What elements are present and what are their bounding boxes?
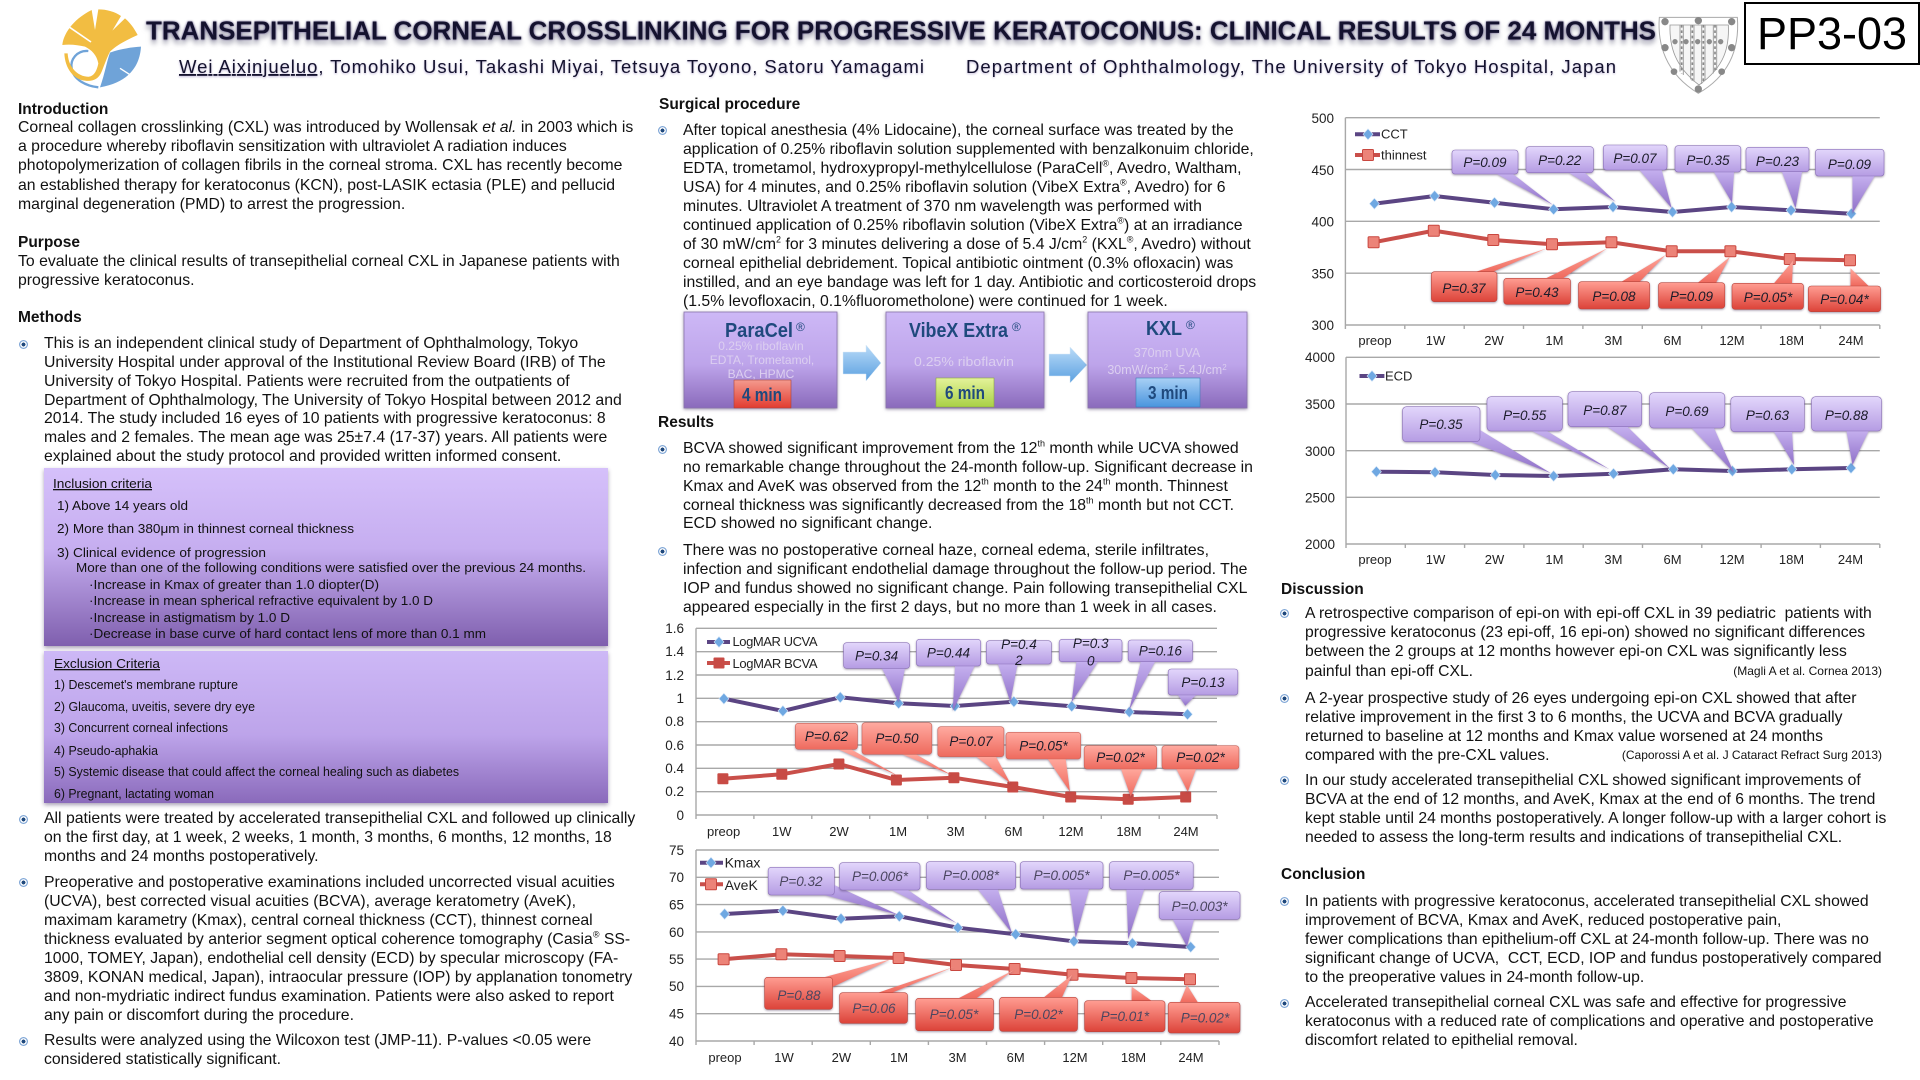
text: results bullet 2: IOP and fundus showed no significant change. Pain following transepithelial CXL [683,580,1247,597]
step: ParaCel [684,312,837,408]
text: discussion bullet 1 [1305,604,1882,681]
step: ParaCel: 4 min [742,385,782,405]
chart: CCT and thinnest: 12M [1719,333,1745,348]
logo: ginkgo leaf [62,9,141,88]
chart: CCT and thinnest: preop [1358,333,1392,348]
chart: CCT and thinnest: P=0.09 [1670,289,1714,304]
text: introduction body [18,119,633,213]
chart: LogMAR UCVA and BCVA: 2W [829,824,849,839]
chart: CCT and thinnest: P=0.07 [1613,151,1657,166]
text: conclusion bullet 1: significant change of UCVA, CCT, ECD, IOP and fundus postoperatively compared [1305,950,1882,967]
legend: CCT [1381,126,1408,141]
chart: LogMAR UCVA and BCVA: 1.2 [665,668,684,683]
chart: LogMAR UCVA and BCVA: 0.4 [665,761,684,776]
chart: LogMAR UCVA and BCVA: 0.8 [665,714,684,729]
text: discussion bullet 1: A retrospective comparison of epi-on with epi-off CXL in 39 pediatric patients with [1305,605,1872,622]
text: introduction body: photopolymerization of collagen fibrils in the corneal stroma. CXL has recently become [18,157,622,174]
chart: LogMAR UCVA and BCVA: P=0.13 [1181,675,1225,690]
panel: exclusion criteria: 1) Descemet's membrane rupture [54,677,238,692]
text: surgical procedure body: of 30 mW/cm2 for 3 minutes delivering a dose of 5.4 J/cm2 (KXL®, Avedro) without [683,235,1251,253]
text: discussion bullet 3: needed to assess the long-term results and indications of transepithelial CXL. [1305,829,1842,846]
chart: CCT and thinnest: 6M [1663,333,1682,348]
text: methods bullet 2: on the first day, at 1 week, 2 weeks, 1 month, 3 months, 6 months, 12 months, 18 [44,829,612,846]
text: discussion bullet 3: BCVA at the end of 12 months, and AveK, Kmax at the end of 6 months. The trend [1305,791,1875,808]
chart: LogMAR UCVA and BCVA: P=0.02* [1176,750,1225,765]
step: VibeX Extra: 0.25% riboflavin [914,354,1014,369]
text: results bullet 2 [683,542,1247,617]
chart: CCT and thinnest: 1M [1545,333,1563,348]
text: methods bullet 3: 1000, TOMEY, Japan), endothelial cell density (ECD) by specular microscopy (FA- [44,950,618,967]
text: methods bullet 3: and non-mydriatic indirect fundus examination. Patients were also asked to report [44,988,614,1005]
chart: LogMAR UCVA and BCVA: 1.4 [665,644,684,659]
chart: Kmax and AveK: 24M [1178,1050,1204,1065]
chart: ECD: 1W [1426,552,1446,567]
heading: Purpose: Purpose [18,234,80,251]
text: discussion bullet 2: relative improvement in the first 3 to 6 months, the UCVA and BCVA gradually [1305,709,1842,726]
text: results bullet 2: infection and significant endothelial damage throughout the follow-up period. The [683,561,1247,578]
text: methods bullet 3: maximam karametry (Kmax), central corneal thickness (CCT), thinnest corneal [44,912,593,929]
chart: LogMAR UCVA and BCVA: P=0.05* [1019,738,1068,754]
chart: ECD: P=0.63 [1746,408,1790,423]
text: methods bullet 4 [44,1032,591,1070]
chart: Kmax and AveK: P=0.02* [1181,1010,1230,1026]
text: results bullet 1 [683,440,1253,534]
panel: inclusion criteria: 1) Above 14 years old [57,498,188,513]
panel: exclusion criteria: 6) Pregnant, lactating woman [54,786,214,801]
text: conclusion bullet 1: fewer complications than epithelium-off CXL at 24-month follow-up. There was no [1305,931,1869,948]
text: results bullet 2: appeared especially in the first 2 days, but no more than 1 week in all cases. [683,599,1217,616]
panel: exclusion criteria: 2) Glaucoma, uveitis, severe dry eye [54,699,255,714]
text: methods bullet 1: University Hospital under approval of the Institutional Review Board (IRB) of The [44,354,606,371]
text: purpose body: To evaluate the clinical results of transepithelial corneal CXL in Japanese patients with [18,253,620,270]
panel: exclusion criteria: 4) Pseudo-aphakia [54,743,159,758]
step: ParaCel: EDTA, Trometamol, [710,353,814,367]
chart: Kmax and AveK: 12M [1062,1050,1088,1065]
chart: ECD: 2500 [1305,490,1335,506]
text: discussion bullet 2: returned to baseline at 12 months and Kmax value worsened at 24 months [1305,728,1823,745]
chart: CCT and thinnest: P=0.22 [1538,153,1582,168]
chart: LogMAR UCVA and BCVA: P=0.16 [1139,644,1182,658]
chart: Kmax and AveK: 2W [832,1050,852,1065]
heading: Discussion: Discussion [1281,581,1364,598]
chart: CCT and thinnest: 350 [1311,266,1334,282]
text: results bullet 1: corneal thickness was significantly decreased from the 18th month but not CCT. [683,495,1234,514]
text: surgical procedure body: minutes. Ultraviolet A treatment of 370 nm wavelength was performed with [683,198,1202,215]
chart: Kmax and AveK: P=0.05* [930,1007,979,1022]
panel: exclusion criteria: 3) Concurrent corneal infections [54,720,228,735]
chart: Kmax and AveK: P=0.01* [1101,1009,1150,1024]
heading: Results: Results [658,414,714,431]
chart: CCT and thinnest: 300 [1311,318,1334,333]
panel: inclusion criteria: 3) Clinical evidence of progression [57,545,266,560]
chart: LogMAR UCVA and BCVA: preop [707,824,740,839]
text: methods bullet 2: months and 24 months postoperatively. [44,848,319,865]
legend: AveK [725,877,758,893]
legend [1355,126,1427,162]
legend: LogMAR BCVA [732,656,818,671]
chart: Kmax and AveK: P=0.02* [1014,1007,1063,1022]
panel: inclusion criteria: ·Increase in mean spherical refractive equivalent by 1.0 D [89,593,433,608]
chart: ECD: preop [1358,552,1392,567]
text: surgical procedure body: instilled, and an eye bandage was left for 1 day. Antibiotic and corticosteroid drops [683,274,1256,291]
arrow: ParaCel to VibeX [843,345,881,381]
text: discussion bullet 1: (Magli A et al. Cornea 2013) [1733,664,1882,678]
step: KXL: ® [1186,318,1195,332]
step: KXL: 30mW/cm [1107,363,1164,377]
chart: Kmax and AveK: P=0.005* [1123,868,1180,883]
text: discussion bullet 1: painful than epi-off CXL. [1305,663,1473,680]
text: results bullet 1: BCVA showed significant improvement from the 12th month while UCVA showed [683,439,1239,457]
chart: Kmax and AveK: 6M [1007,1050,1025,1065]
step: VibeX Extra: VibeX Extra [909,320,1009,342]
chart: Kmax and AveK: 1M [890,1050,908,1065]
callouts: P=0.35 [1419,417,1463,432]
text: surgical procedure body: continued application of 0.25% riboflavin solution (VibeX Extra®) at an irradiance [683,216,1243,234]
panel: inclusion criteria: 2) More than 380μm in thinnest corneal thickness [57,521,355,536]
text: results bullet 1: ECD showed no significant change. [683,515,932,532]
title and author header [144,18,1658,79]
text: conclusion bullet 2: Accelerated transepithelial corneal CXL was safe and effective for progressive [1305,994,1847,1011]
text: methods bullet 1: explained about the study protocol and provided written informed consent. [44,448,561,465]
chart: LogMAR UCVA and BCVA: P=0.07 [949,734,993,749]
text: conclusion bullet 2 [1305,994,1874,1051]
chart: Kmax and AveK: P=0.006* [852,869,909,884]
text: methods bullet 1: males and 2 females. The mean age was 25±7.4 (17-37) years. All patients were [44,429,607,446]
text: discussion bullet 2: compared with the pre-CXL values. [1305,747,1549,764]
step: ParaCel: 0.25% riboflavin [718,339,804,353]
department: Department of Ophthalmology, The University of Tokyo Hospital, Japan [966,56,1616,77]
text: methods bullet 3: (UCVA), best corrected visual acuities (BCVA), average keratometry (AveK), [44,893,576,910]
text: conclusion bullet 1: to the preoperative values in 24-month follow-up. [1305,969,1644,986]
text: methods bullet 1: Department of Ophthalmology, The University of Tokyo Hospital between 2012 and [44,392,622,409]
chart: CCT and thinnest: 400 [1311,214,1334,230]
text: introduction body: marginal degeneration (PMD) to arrest the progression. [18,196,405,213]
chart: Kmax and AveK: 55 [669,952,684,967]
legend: Kmax [725,855,760,871]
chart: CCT and thinnest: P=0.09 [1828,157,1872,172]
chart: LogMAR UCVA and BCVA: P=0.3 [1073,636,1109,651]
text: surgical procedure body: USA) for 4 minutes, and 0.25% riboflavin solution (VibeX Extra®, Avedro) for 6 [683,178,1226,196]
callouts: P=0.34 [855,648,898,664]
step: VibeX Extra [886,312,1044,408]
chart: Kmax and AveK: 70 [669,870,684,885]
text: discussion bullet 3: In our study accelerated transepithelial CXL showed significant improvements of [1305,772,1861,789]
chart: LogMAR UCVA and BCVA: 2 [1014,653,1023,668]
text: results bullet 1: Kmax and AveK was observed from the 12th month to the 24th month. Thinnest [683,476,1228,495]
chart: ECD: 24M [1838,552,1863,567]
text: discussion bullet 3 [1305,771,1886,847]
chart: LogMAR UCVA and BCVA: P=0.4 [1001,637,1037,652]
step: KXL: KXL [1146,318,1182,340]
chart: LogMAR UCVA and BCVA: 18M [1116,824,1142,839]
chart: Kmax and AveK: P=0.005* [1034,868,1090,883]
chart: Kmax and AveK: 3M [948,1050,967,1065]
chart: LogMAR UCVA and BCVA: 1.6 [665,621,684,636]
text: introduction body: a procedure whereby riboflavin sensitization with ultraviolet A radiation induces [18,138,567,155]
chart: CCT and thinnest: 24M [1838,333,1864,348]
text: surgical procedure body: corneal epithelial debridement. Topical antibiotic ointment (0.3% ofloxacin) was [683,255,1233,272]
authors: Wei Aixinjueluo, Tomohiko Usui, Takashi Miyai, Tetsuya Toyono, Satoru Yamagami [179,56,924,77]
chart: Kmax and AveK: preop [708,1050,742,1065]
chart: Kmax and AveK: 50 [669,979,684,994]
chart: CCT and thinnest: P=0.35 [1686,153,1730,168]
legend [707,634,818,671]
text: purpose body [18,253,620,289]
chart: LogMAR UCVA and BCVA: P=0.50 [875,731,919,746]
step: KXL: 2 [1164,363,1169,372]
chart: Kmax and AveK: P=0.06 [852,1001,896,1016]
chart: ECD: 4000 [1305,350,1335,365]
chart: CCT and thinnest: P=0.37 [1442,281,1486,296]
text: surgical procedure body: After topical anesthesia (4% Lidocaine), the corneal surface was treated by the [683,122,1234,139]
text: surgical procedure body: application of 0.25% riboflavin solution supplemented with benzalkonuim chloride, [683,141,1254,158]
text: conclusion bullet 1 [1305,892,1882,987]
chart: CCT and thinnest: 1W [1426,333,1446,348]
step: ParaCel: ParaCel [725,320,793,342]
chart: LogMAR UCVA and BCVA: 12M [1058,824,1084,839]
text: discussion bullet 2: A 2-year prospective study of 26 eyes undergoing epi-on CXL showed that after [1305,690,1856,707]
text: methods bullet 2 [44,810,635,867]
text: surgical procedure body: EDTA, trometamol, hydroxypropyl-methylcellulose (ParaCell®, Avedro, Waltham, [683,159,1242,177]
panel: exclusion criteria: 5) Systemic disease that could affect the corneal healing such as diabetes [54,764,459,779]
main title: TRANSEPITHELIAL CORNEAL CROSSLINKING FOR PROGRESSIVE KERATOCONUS: CLINICAL RESULTS OF 24 MONTHS [146,18,1656,46]
chart: Kmax and AveK: 75 [669,843,684,858]
arrow: VibeX to KXL [1049,347,1087,383]
chart: LogMAR UCVA and BCVA: P=0.62 [805,729,848,744]
text: conclusion bullet 2: discomfort related to epithelial removal. [1305,1032,1578,1049]
chart: ECD: 6M [1663,552,1682,567]
chart: Kmax and AveK: P=0.003* [1172,899,1228,914]
text: methods bullet 1 [44,335,622,467]
chart: ECD: 3000 [1305,444,1335,459]
chart: CCT and thinnest: P=0.05* [1744,290,1793,305]
step: VibeX Extra: 6 min [945,383,985,403]
text: surgical procedure body: (1.5% levofloxacin, 0.1%fluorometholone) were continued for 1 week. [683,293,1168,310]
panel: inclusion criteria: More than one of the following conditions were satisfied over the previous 24 months. [76,560,586,575]
text: methods bullet 1: University of Tokyo Hospital. Patients were recruited from the outpatients of [44,373,570,390]
chart: Kmax and AveK: 45 [669,1006,684,1022]
heading: Surgical procedure: Surgical procedure [659,96,800,113]
text: discussion bullet 3: kept stable until 24 months postoperatively. A longer follow-up with a larger cohort is [1305,810,1886,827]
chart: Kmax and AveK: 60 [669,925,684,940]
text: surgical procedure body [683,121,1256,311]
text: methods bullet 1: 2014. The study included 16 eyes of 10 patients with progressive keratoconus: 8 [44,410,606,427]
panel: exclusion criteria: Exclusion Criteria [54,656,161,671]
callouts: P=0.32 [779,874,823,889]
chart: Kmax and AveK: P=0.008* [943,868,1000,883]
step: KXL [1088,312,1247,408]
chart: ECD: P=0.69 [1665,404,1709,419]
heading: Methods: Methods [18,309,82,326]
chart: CCT and thinnest: 18M [1779,333,1804,348]
callouts [1402,407,1551,473]
chart: LogMAR UCVA and BCVA: 3M [947,824,965,839]
chart: LogMAR UCVA and BCVA: 24M [1173,824,1199,839]
poster number box: PP3-03 [1757,8,1907,59]
text: methods bullet 4: considered statistically significant. [44,1051,281,1068]
chart: ECD: P=0.88 [1825,408,1869,423]
chart: CCT and thinnest: 2W [1484,333,1504,348]
text: methods bullet 3 [44,873,632,1025]
text: results bullet 2: There was no postoperative corneal haze, corneal edema, sterile infiltrates, [683,542,1209,559]
chart: ECD: 18M [1779,552,1804,567]
step: KXL: 370nm UVA [1134,346,1201,360]
chart: Kmax and AveK: 65 [669,898,684,912]
text: conclusion bullet 1: improvement of BCVA, Kmax and AveK, reduced postoperative pain, [1305,912,1781,929]
panel: inclusion criteria: ·Decrease in base curve of hard contact lens of more than 0.1 mm [89,626,486,641]
step: VibeX Extra: ® [1012,320,1021,334]
text: methods bullet 3: thickness evaluated by anterior segment optical coherence tomography (Casia® SS- [44,930,630,948]
chart: ECD: 3500 [1305,397,1335,412]
text: methods bullet 4: Results were analyzed using the Wilcoxon test (JMP-11). P-values <0.05 were [44,1032,591,1049]
step: KXL: 3 min [1148,383,1188,403]
callouts [1452,150,1553,205]
text: methods bullet 3: 3809, KONAN medical, Japan), intraocular pressure (IOP) by applanation tonometry [44,969,632,986]
heading: Conclusion: Conclusion [1281,866,1365,883]
text: results bullet 1: no remarkable change throughout the 24-month follow-up. Significant decrease in [683,459,1253,476]
chart: ECD: P=0.55 [1503,408,1547,423]
text: introduction body: an established therapy for keratoconus (KCN), post-LASIK ectasia (PLE) and pellucid [18,177,615,194]
chart: CCT and thinnest: P=0.43 [1515,285,1559,300]
chart: CCT and thinnest: P=0.23 [1756,154,1800,169]
chart: ECD: P=0.87 [1583,403,1627,418]
chart: LogMAR UCVA and BCVA: 0 [1087,654,1095,669]
text: purpose body: progressive keratoconus. [18,272,194,289]
chart: CCT and thinnest: P=0.08 [1592,289,1636,304]
poster number box [1744,2,1920,65]
chart: LogMAR UCVA and BCVA: P=0.02* [1096,750,1145,765]
chart: Kmax and AveK: 18M [1121,1050,1146,1065]
chart: LogMAR UCVA and BCVA: 1 [676,691,684,706]
step: ParaCel: BAC, HPMC [728,367,795,381]
step: KXL: 2 [1222,363,1227,372]
panel: inclusion criteria: Inclusion criteria [53,476,153,491]
chart: Kmax and AveK: P=0.88 [777,988,821,1003]
chart: LogMAR UCVA and BCVA: 1M [889,824,907,839]
chart: LogMAR UCVA and BCVA: 0.6 [665,738,684,753]
callouts [768,867,899,915]
chart: ECD: 2W [1485,552,1505,567]
text: discussion bullet 1: progressive keratoconus (23 epi-off, 16 epi-on) showed no significant differences [1305,624,1865,641]
chart: LogMAR UCVA and BCVA: 0.2 [665,784,684,799]
chart: ECD: 2000 [1305,537,1335,552]
chart: LogMAR UCVA and BCVA: P=0.44 [927,646,970,660]
text: discussion bullet 2 [1305,689,1882,765]
callouts: P=0.09 [1463,155,1507,170]
legend [1360,369,1412,384]
chart: ECD: 1M [1545,552,1563,567]
text: conclusion bullet 2: keratoconus with a reduced rate of complications and operative and postoperative [1305,1013,1874,1030]
chart: CCT and thinnest: 3M [1604,333,1622,348]
chart: Kmax and AveK: 40 [669,1034,684,1049]
text: methods bullet 2: All patients were treated by accelerated transepithelial CXL and followed up clinically [44,810,635,827]
chart: CCT and thinnest: P=0.04* [1820,292,1869,307]
chart: LogMAR UCVA and BCVA: 6M [1004,824,1023,839]
legend [700,855,760,893]
legend: thinnest [1381,147,1427,162]
text: methods bullet 3: any pain or discomfort during the procedure. [44,1007,354,1024]
chart: LogMAR UCVA and BCVA: 1W [772,824,792,839]
heading: Introduction: Introduction [18,101,108,118]
text: introduction body: Corneal collagen crosslinking (CXL) was introduced by Wollensak et al. in 2003 which is [18,119,633,136]
text: discussion bullet 2: (Caporossi A et al. J Cataract Refract Surg 2013) [1622,748,1882,762]
chart: ECD: 12M [1719,552,1745,567]
chart: CCT and thinnest: 500 [1311,111,1334,126]
chart: Kmax and AveK: 1W [774,1050,794,1065]
chart: LogMAR UCVA and BCVA: 0 [676,808,684,823]
text: discussion bullet 1: between the 2 groups at 12 months however epi-on CXL was significantly less [1305,643,1847,660]
step: KXL: , 5.4J/cm [1168,363,1222,377]
text: methods bullet 1: This is an independent clinical study of Department of Ophthalmology, Tokyo [44,335,578,352]
step: ParaCel: ® [796,320,805,334]
panel: inclusion criteria: ·Increase in Kmax of greater than 1.0 diopter(D) [89,577,379,592]
legend: LogMAR UCVA [732,634,818,649]
text: conclusion bullet 1: In patients with progressive keratoconus, accelerated transepithelial CXL showed [1305,893,1869,910]
chart: ECD: 3M [1604,552,1622,567]
legend: ECD [1385,369,1412,384]
panel: inclusion criteria: ·Increase in astigmatism by 1.0 D [89,610,290,625]
text: methods bullet 3: Preoperative and postoperative examinations included uncorrected visual acuities [44,874,615,891]
chart: CCT and thinnest: 450 [1311,163,1334,178]
icon: university crest shield [1658,16,1738,94]
callouts [844,643,910,702]
